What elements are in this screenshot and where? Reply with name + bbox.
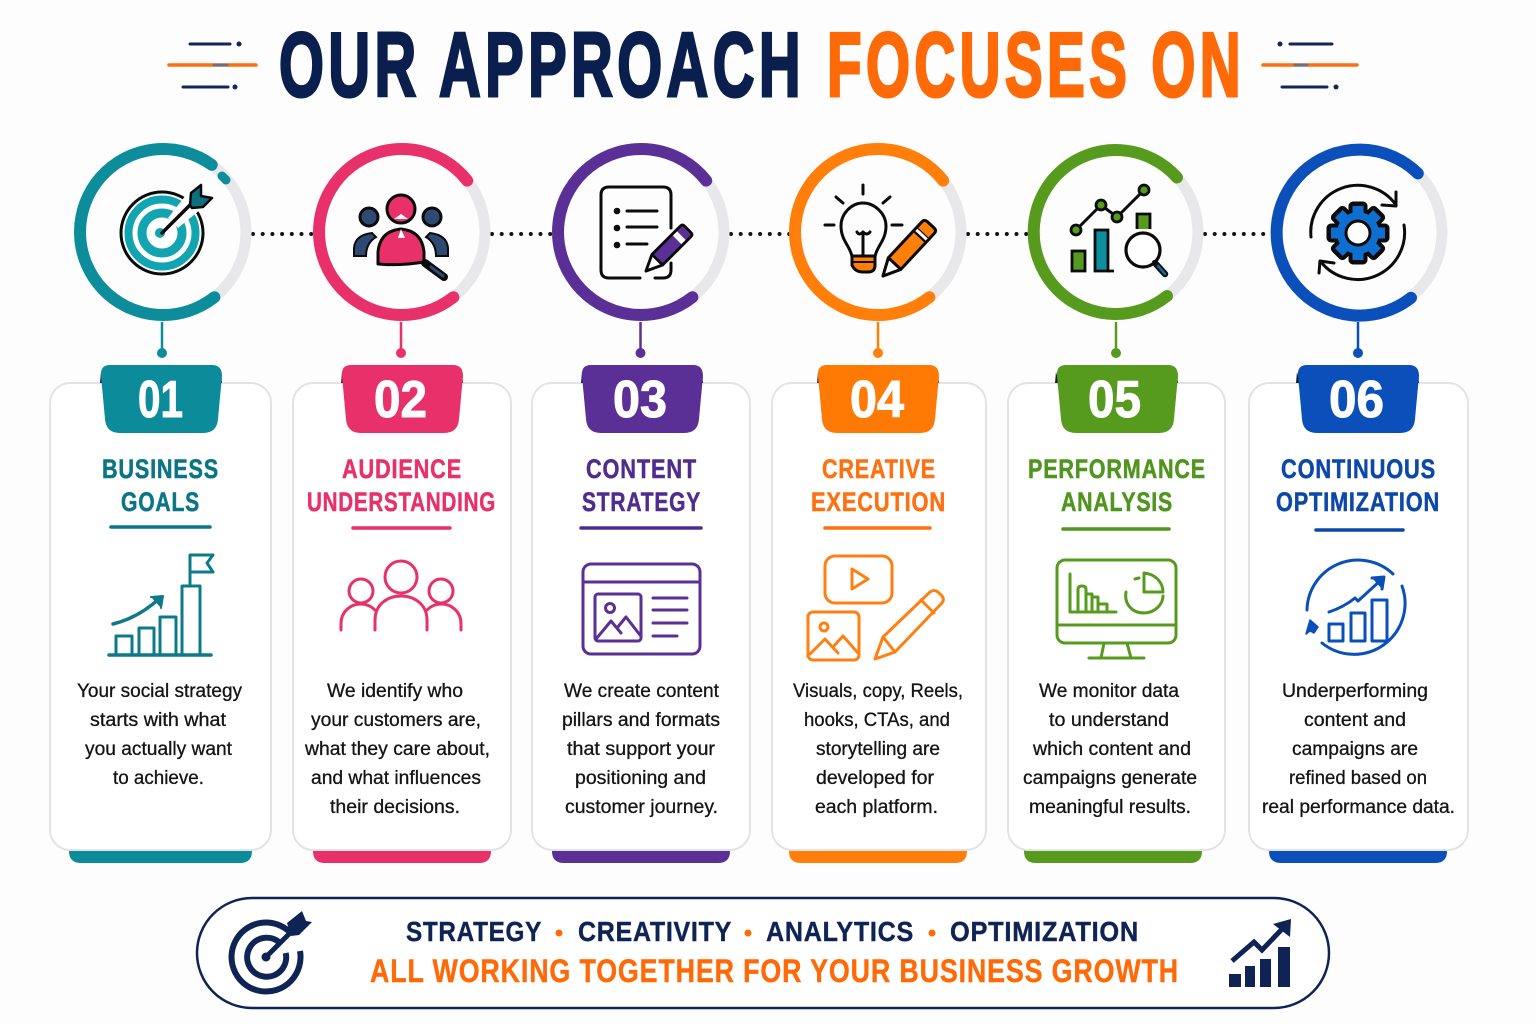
circle ring 03 xyxy=(558,149,724,315)
card 05 xyxy=(1008,383,1225,850)
icon: people outline xyxy=(341,561,461,630)
footer bar 01 xyxy=(69,845,252,863)
body text 02 xyxy=(304,681,490,818)
number badge 02 xyxy=(341,365,463,433)
icon: bar chart with flag xyxy=(109,555,213,655)
heading 02: AUDIENCE xyxy=(342,454,462,484)
body text 01: Your social strategy xyxy=(77,681,242,702)
heading 04: EXECUTION xyxy=(811,487,946,517)
footer banner xyxy=(197,898,1329,1008)
heading 06: OPTIMIZATION xyxy=(1276,487,1440,517)
heading 01: BUSINESS xyxy=(102,454,219,484)
heading underline 05 xyxy=(1063,527,1169,531)
heading underline 06 xyxy=(1316,528,1403,532)
card 01 xyxy=(50,383,271,850)
body text 06: Underperforming xyxy=(1282,681,1428,702)
heading underline 03 xyxy=(581,526,701,530)
connector stem 03 xyxy=(636,322,646,358)
body text 05 xyxy=(1023,681,1197,818)
circle ring 04 xyxy=(795,149,961,315)
heading 03: CONTENT xyxy=(586,454,697,484)
icon: footer growth chart xyxy=(1229,919,1291,987)
number badge 06 xyxy=(1296,365,1419,433)
heading 01 xyxy=(102,454,219,517)
heading underline 02 xyxy=(353,526,450,530)
icon: light bulb and pencil xyxy=(825,185,937,282)
body text 02: We identify who xyxy=(327,681,463,702)
icon: analytics chart with magnifier xyxy=(1071,185,1165,274)
body text 05: which content and xyxy=(1032,739,1191,760)
number badge 03: 03 xyxy=(613,371,667,429)
body text 02: and what influences xyxy=(311,768,481,789)
body text 03: customer journey. xyxy=(565,797,718,818)
heading 06: CONTINUOUS xyxy=(1281,454,1436,484)
heading 06 xyxy=(1276,454,1440,517)
heading 02 xyxy=(307,454,496,517)
heading 01: GOALS xyxy=(121,487,200,517)
icon: document with pencil xyxy=(601,187,693,278)
banner line 1: ANALYTICS xyxy=(766,916,914,947)
banner pill outline xyxy=(197,898,1329,1008)
title: OUR APPROACH xyxy=(279,15,805,116)
connector stem 01 xyxy=(157,322,167,358)
body text 03: positioning and xyxy=(575,768,706,789)
body text 03 xyxy=(562,681,720,818)
body text 06: real performance data. xyxy=(1262,797,1455,818)
body text 06: refined based on xyxy=(1289,768,1427,789)
panel: step 05 performance analysis xyxy=(1008,150,1225,863)
heading 05: PERFORMANCE xyxy=(1028,454,1206,484)
body text 05: meaningful results. xyxy=(1029,797,1191,818)
dotted connectors between circles xyxy=(253,232,1271,236)
body text 05: We monitor data xyxy=(1039,681,1179,702)
icon: left title speed lines xyxy=(169,42,256,90)
icon: footer target xyxy=(232,911,312,992)
number badge 01: 01 xyxy=(138,371,183,429)
heading underline 04 xyxy=(825,526,930,530)
number badge 03 xyxy=(581,365,703,433)
connector stem 06 xyxy=(1353,322,1363,358)
panel: step 02 audience understanding xyxy=(293,149,511,863)
panel: step 03 content strategy xyxy=(532,149,750,863)
body text 06 xyxy=(1262,681,1455,818)
body text 02: what they care about, xyxy=(304,739,490,760)
connector stem 02 xyxy=(396,322,406,358)
body text 03: We create content xyxy=(564,681,720,702)
body text 03: that support your xyxy=(567,739,716,760)
icon: growth bars in a circular arrow xyxy=(1306,560,1405,654)
body text 03: pillars and formats xyxy=(562,710,720,731)
connector stem 04 xyxy=(873,322,883,358)
body text 06: campaigns are xyxy=(1292,739,1418,760)
circle ring 06 xyxy=(1276,149,1442,316)
number badge 05: 05 xyxy=(1088,371,1141,429)
footer bar 02 xyxy=(313,845,491,863)
body text 02: their decisions. xyxy=(330,797,460,818)
title: FOCUSES ON xyxy=(827,15,1245,116)
connector stem 05 xyxy=(1111,322,1121,358)
number badge 01 xyxy=(100,365,222,433)
body text 04 xyxy=(793,681,963,818)
heading 03: STRATEGY xyxy=(582,487,701,517)
body text 05: to understand xyxy=(1049,710,1169,731)
card 06 xyxy=(1249,383,1468,850)
body text 01 xyxy=(77,681,242,789)
panel: step 04 creative execution xyxy=(772,149,986,863)
footer bar 05 xyxy=(1024,845,1202,863)
body text 01: to achieve. xyxy=(113,768,204,789)
circle ring 05 xyxy=(1034,150,1198,314)
panel: step 06 continuous optimization xyxy=(1249,149,1468,863)
icon: right title speed lines xyxy=(1263,42,1357,90)
body text 01: you actually want xyxy=(85,739,233,760)
heading 05 xyxy=(1028,454,1206,517)
heading 03 xyxy=(582,454,701,517)
icon: web page layout xyxy=(583,564,700,654)
banner line 1: STRATEGY xyxy=(406,916,542,947)
icon: gear with cycle arrows xyxy=(1311,185,1405,280)
card 04 xyxy=(772,383,986,850)
number badge 04 xyxy=(817,365,939,433)
icon: audience with magnifier xyxy=(354,195,448,277)
body text 01: starts with what xyxy=(90,710,227,731)
body text 04: storytelling are xyxy=(816,739,940,760)
body text 05: campaigns generate xyxy=(1023,768,1197,789)
heading underline 01 xyxy=(111,525,210,529)
heading 04: CREATIVE xyxy=(822,454,936,484)
banner line 1 xyxy=(406,916,1139,947)
body text 04: hooks, CTAs, and xyxy=(804,710,950,731)
banner line 1: OPTIMIZATION xyxy=(950,916,1139,947)
icon: video, image and pencil xyxy=(808,556,943,660)
footer bar 03 xyxy=(552,845,730,863)
heading 04 xyxy=(811,454,946,517)
body text 02: your customers are, xyxy=(311,710,481,731)
number badge 04: 04 xyxy=(850,371,904,429)
circle ring 01 xyxy=(80,149,246,315)
number badge 05 xyxy=(1055,365,1178,433)
panel: step 01 business goals xyxy=(50,149,271,863)
footer bar 06 xyxy=(1269,845,1447,863)
number badge 02: 02 xyxy=(374,371,427,429)
banner line 1: CREATIVITY xyxy=(578,916,732,947)
body text 04: developed for xyxy=(816,768,935,789)
number badge 06: 06 xyxy=(1329,371,1384,429)
icon: monitor dashboard xyxy=(1057,560,1176,658)
card 02 xyxy=(293,383,511,850)
body text 04: Visuals, copy, Reels, xyxy=(793,681,963,702)
heading 05: ANALYSIS xyxy=(1061,487,1173,517)
footer bar 04 xyxy=(789,845,967,863)
body text 06: content and xyxy=(1304,710,1406,731)
body text 04: each platform. xyxy=(815,797,938,818)
banner line 2: ALL WORKING TOGETHER FOR YOUR BUSINESS GROWTH xyxy=(370,953,1179,989)
icon: target with arrow xyxy=(121,185,212,274)
card 03 xyxy=(532,383,750,850)
heading 02: UNDERSTANDING xyxy=(307,487,496,517)
circle ring 02 xyxy=(319,149,485,315)
